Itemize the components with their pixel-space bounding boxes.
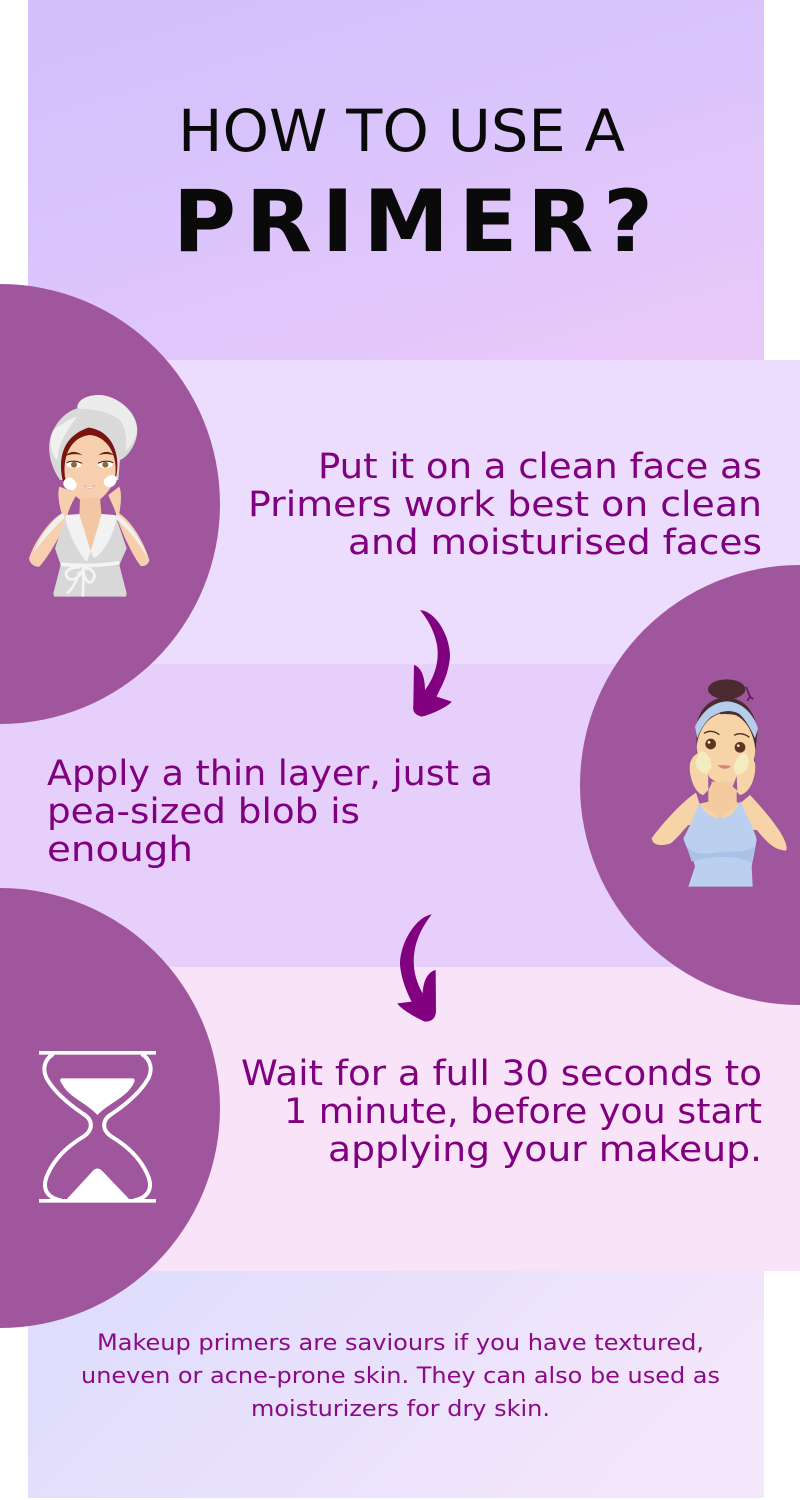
step 1 text <box>248 447 762 563</box>
title <box>173 97 653 272</box>
title: HOW TO USE A <box>178 97 625 165</box>
panel: step 1 <box>0 360 800 664</box>
footer note: moisturizers for dry skin. <box>251 1397 550 1422</box>
title: PRIMER? <box>173 172 653 272</box>
arrow: step 1 to step 2 <box>413 610 452 717</box>
panel: step 3 <box>0 967 800 1271</box>
icon: woman with headband <box>652 679 787 887</box>
step 3 text: applying your makeup. <box>328 1130 762 1170</box>
footer note <box>81 1331 720 1422</box>
step 1 text: Put it on a clean face as <box>318 447 762 487</box>
circle: step 3 <box>0 888 220 1328</box>
icon: woman with towel <box>29 395 149 597</box>
step 2 text: pea-sized blob is <box>47 792 360 832</box>
step 3 text: 1 minute, before you start <box>284 1092 762 1132</box>
step 3 text: Wait for a full 30 seconds to <box>241 1054 762 1094</box>
arrow: step 2 to step 3 <box>397 914 436 1022</box>
step 1 text: Primers work best on clean <box>248 485 762 525</box>
panel: step 2 <box>0 664 800 967</box>
step 2 text: Apply a thin layer, just a <box>47 754 493 794</box>
header background <box>28 0 764 360</box>
circle: step 2 <box>580 565 800 1005</box>
step 2 text: enough <box>47 830 193 870</box>
circle: step 1 <box>0 284 220 724</box>
footer note: Makeup primers are saviours if you have textured, <box>97 1331 704 1356</box>
step 1 text: and moisturised faces <box>348 523 762 563</box>
step 3 text <box>241 1054 762 1170</box>
step 2 text <box>47 754 493 870</box>
footer background <box>28 1271 764 1498</box>
icon: hourglass <box>39 1051 156 1203</box>
footer note: uneven or acne-prone skin. They can also be used as <box>81 1364 720 1389</box>
